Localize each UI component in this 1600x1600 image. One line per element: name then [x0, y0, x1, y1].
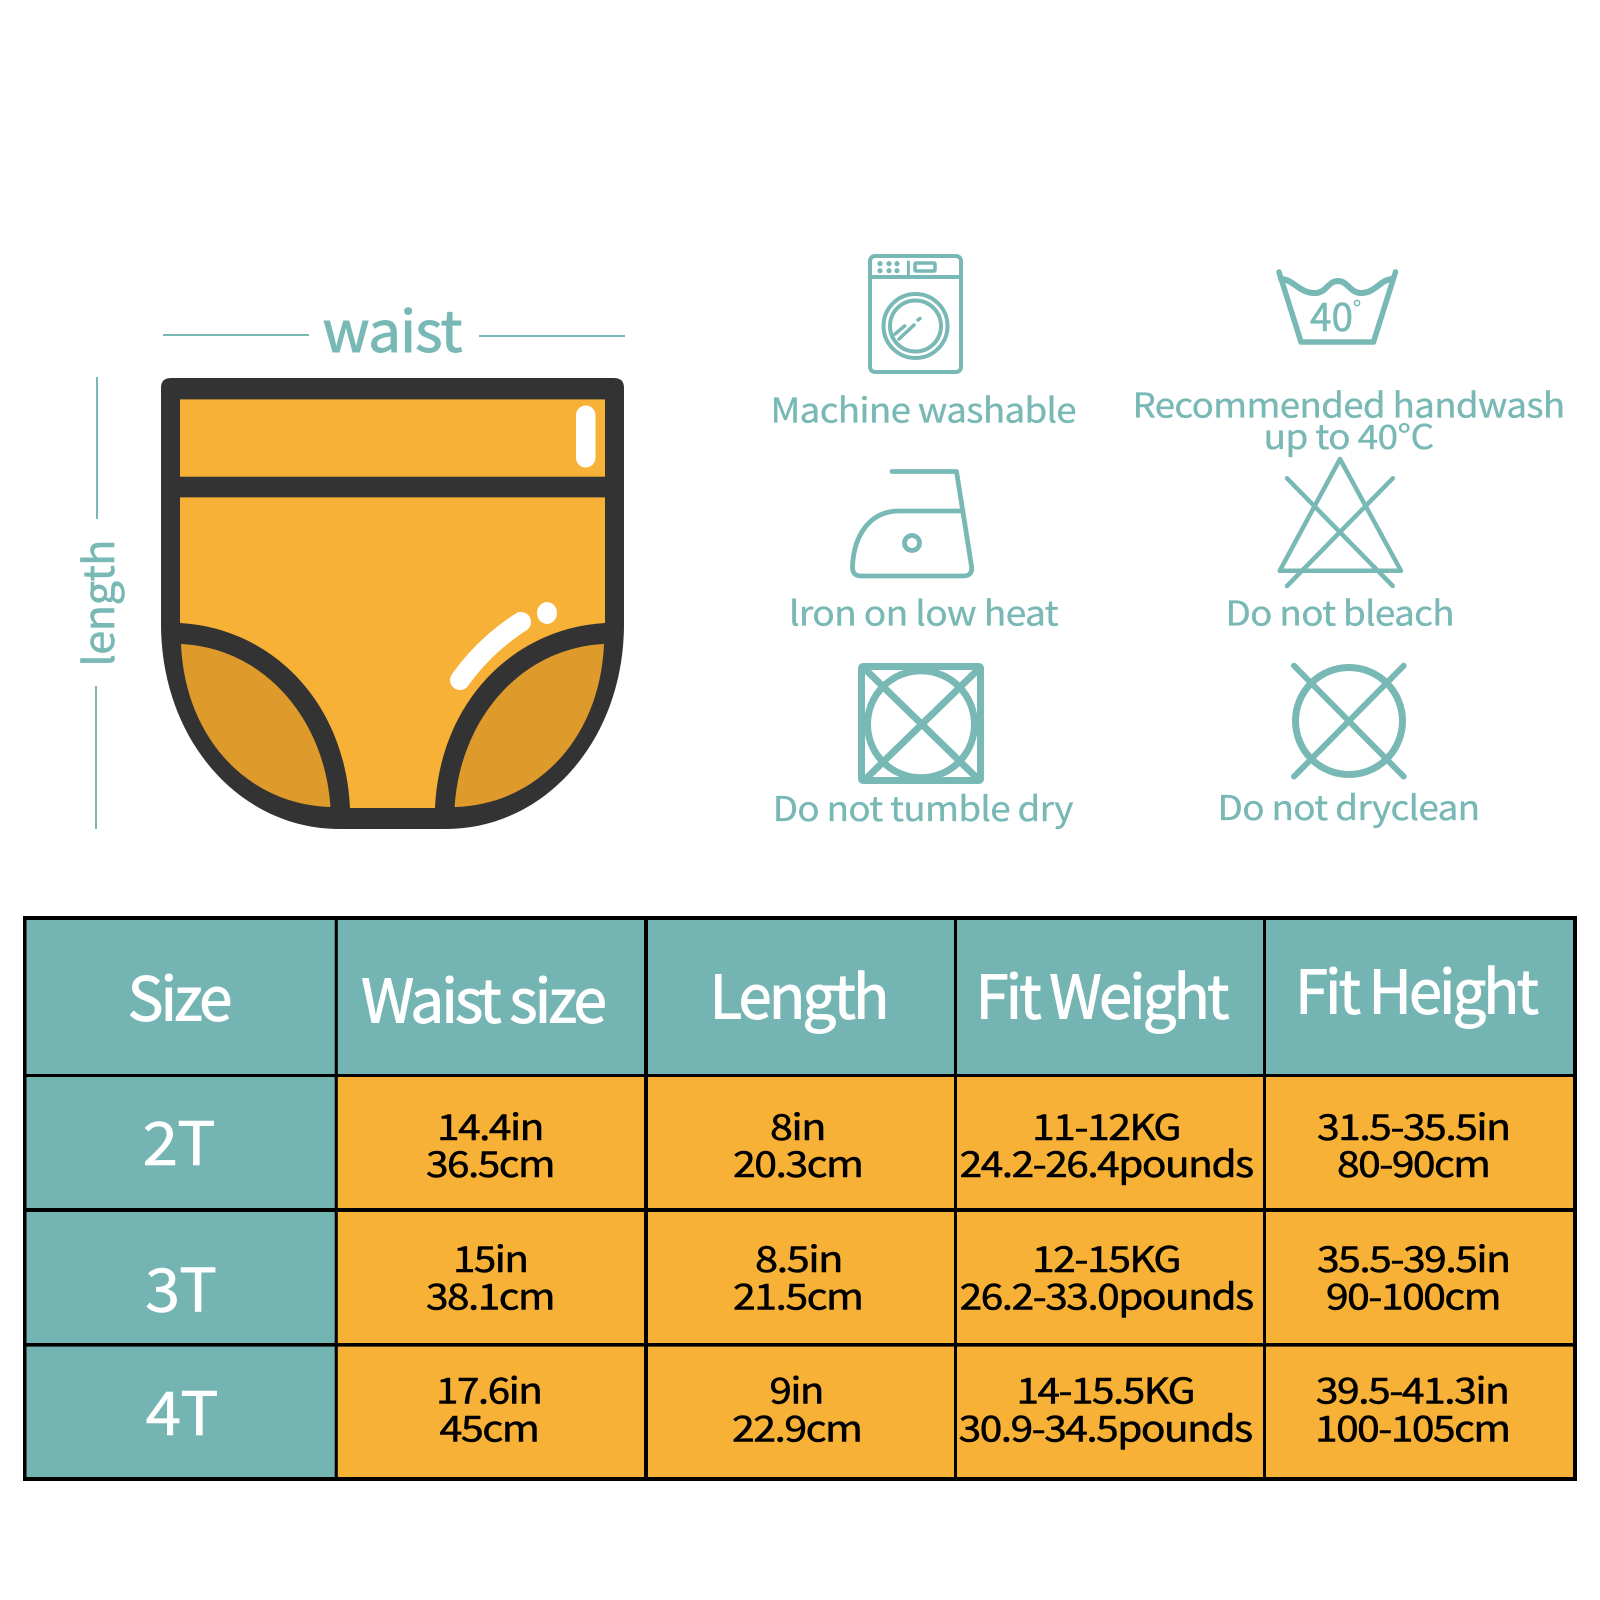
care item: machine washable: Machine washable	[770, 384, 1076, 433]
icon: underwear diagram	[161, 378, 624, 829]
care item: recommended handwash: up to 40°C	[1264, 410, 1434, 459]
row: 4T	[146, 1364, 1510, 1453]
row: 4T: 4T	[146, 1366, 218, 1453]
icon: crossed tumble dryer square	[862, 666, 980, 780]
care item: do not bleach: Do not bleach	[1226, 586, 1454, 635]
row: 3T: 8.5in	[755, 1232, 842, 1283]
care item: machine washable	[770, 256, 1076, 433]
row: 4T: 30.9-34.5pounds	[959, 1402, 1252, 1452]
table header row: Fit Weight	[976, 950, 1229, 1037]
table cell backgrounds	[23, 916, 1577, 1481]
icon: crossed circle	[1294, 666, 1404, 776]
size table	[23, 916, 1577, 1481]
row: 3T: 21.5cm	[733, 1270, 862, 1320]
icon: washing machine	[870, 256, 961, 372]
care item: recommended handwash	[1132, 272, 1564, 459]
icon: crossed triangle	[1280, 459, 1401, 586]
table header row: Length	[710, 950, 886, 1037]
care item: do not dryclean: Do not dryclean	[1218, 781, 1480, 830]
row: 3T: 15in	[453, 1232, 528, 1283]
row: 4T: 39.5-41.3in	[1316, 1364, 1508, 1415]
row: 3T: 38.1cm	[426, 1270, 554, 1320]
table header row	[128, 945, 1538, 1040]
row: 2T: 24.2-26.4pounds	[960, 1137, 1253, 1188]
table header row: Fit Height	[1295, 945, 1538, 1032]
table header row: Size	[128, 952, 230, 1038]
row: 2T: 8in	[770, 1100, 825, 1151]
care item: do not bleach	[1226, 459, 1454, 635]
table header row: Waist size	[361, 954, 605, 1040]
icon: iron	[852, 472, 972, 576]
care item: iron on low heat: lron on low heat	[789, 586, 1059, 635]
care item: do not tumble dry: Do not tumble dry	[773, 782, 1074, 831]
row: 3T: 90-100cm	[1326, 1270, 1500, 1320]
row: 2T: 80-90cm	[1337, 1137, 1490, 1188]
row: 3T: 12-15KG	[1032, 1232, 1180, 1283]
care item: iron on low heat	[789, 472, 1059, 635]
row: 3T: 26.2-33.0pounds	[960, 1270, 1253, 1320]
row: 4T: 14-15.5KG	[1016, 1364, 1194, 1415]
row: 2T	[142, 1096, 1510, 1188]
row: 2T: 14.4in	[437, 1100, 543, 1151]
row: 2T: 31.5-35.5in	[1317, 1100, 1510, 1151]
row: 4T: 100-105cm	[1315, 1402, 1510, 1452]
row: 2T: 2T	[142, 1096, 215, 1183]
waist measurement label: waist	[322, 287, 462, 369]
row: 4T: 17.6in	[436, 1364, 542, 1415]
row: 2T: 36.5cm	[426, 1137, 554, 1188]
icon: wash basin 40 degrees: 40	[1310, 287, 1353, 343]
row: 3T: 35.5-39.5in	[1317, 1232, 1510, 1283]
row: 4T: 22.9cm	[732, 1402, 862, 1452]
row: 3T	[145, 1232, 1510, 1329]
row: 4T: 45cm	[440, 1402, 538, 1452]
length measurement label: length	[66, 540, 127, 666]
care item: recommended handwash: Recommended handwash	[1132, 379, 1564, 428]
care item: do not tumble dry	[773, 666, 1074, 831]
row: 2T: 20.3cm	[733, 1137, 862, 1188]
row: 4T: 9in	[770, 1364, 823, 1415]
icon: wash basin 40 degrees	[1279, 272, 1396, 343]
care item: do not dryclean	[1218, 666, 1480, 830]
row: 3T: 3T	[145, 1242, 216, 1329]
row: 2T: 11-12KG	[1032, 1100, 1180, 1151]
